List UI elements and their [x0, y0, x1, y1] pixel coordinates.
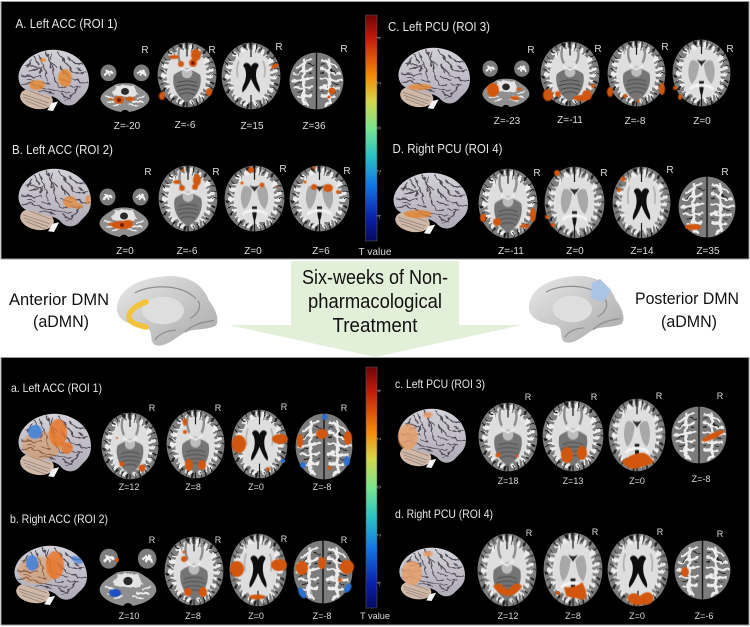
panel: before treatment results — [1, 2, 749, 259]
slice Z=0: R — [656, 391, 663, 401]
slice Z=36 — [290, 44, 348, 132]
slice Z=0: Z=0 — [629, 476, 645, 486]
slice Z=0 — [232, 402, 288, 492]
slice Z=-6: Z=-6 — [177, 246, 198, 257]
slice Z=0: Z=0 — [693, 116, 711, 127]
slice Z=-6: R — [212, 167, 220, 178]
slice Z=0: R — [726, 44, 734, 55]
slice Z=12: R — [526, 528, 533, 538]
slice Z=-6: R — [717, 529, 724, 539]
slice Z=0: Z=0 — [566, 246, 584, 257]
slice Z=0: Z=0 — [629, 611, 645, 621]
colorbar: top T value: -4 — [377, 215, 383, 219]
slice Z=14: Z=14 — [630, 246, 654, 257]
slice Z=8: R — [215, 403, 222, 413]
colorbar: top T value: 4 — [377, 36, 383, 40]
slice Z=0: Z=0 — [244, 246, 262, 257]
slice Z=0: Z=0 — [248, 482, 264, 492]
colorbar: top T value: T value — [358, 247, 392, 258]
slice Z=0 — [609, 391, 665, 486]
slice Z=-20: Z=-20 — [114, 121, 141, 132]
section D: Right PCU ROI 4 — [392, 141, 735, 257]
slice Z=15: Z=15 — [240, 121, 264, 132]
slice Z=-11 — [479, 168, 541, 257]
slice Z=-8: Z=-8 — [692, 474, 710, 484]
slice Z=8: R — [592, 527, 599, 537]
slice Z=8 — [165, 535, 223, 621]
slice Z=6 — [290, 166, 351, 257]
slice Z=8 — [167, 403, 224, 492]
slice Z=-8: Z=-8 — [313, 482, 331, 492]
slice Z=0 cerebellum: R — [144, 167, 152, 178]
colorbar: bottom T value: -2 — [377, 534, 383, 538]
slice Z=0 — [545, 167, 608, 257]
slice Z=0: R — [600, 168, 608, 179]
section b: Right ACC ROI 2: b. Right ACC (ROI 2) — [10, 512, 108, 526]
label: Posterior DMN — [635, 289, 739, 331]
slice Z=-8: R — [341, 403, 348, 413]
slice Z=-11: R — [533, 168, 541, 179]
slice Z=13: Z=13 — [563, 476, 583, 486]
section B: Left ACC ROI 2 — [12, 142, 351, 257]
brain render B — [18, 169, 91, 233]
icon: medial brain with posterior DMN — [529, 276, 624, 343]
slice Z=-23 — [482, 45, 535, 127]
slice Z=0 cerebellum: Z=0 — [116, 246, 134, 257]
slice Z=0: R — [281, 534, 288, 544]
slice Z=-11: Z=-11 — [498, 246, 524, 257]
slice Z=-6 — [675, 529, 730, 621]
slice Z=0 cerebellum — [100, 167, 152, 257]
arrow: six-weeks of treatment — [229, 261, 522, 357]
brain render a — [18, 414, 91, 478]
slice Z=13 — [543, 392, 603, 486]
slice Z=10 cerebellum: R — [149, 535, 156, 545]
slice Z=12: Z=12 — [119, 482, 139, 492]
slice Z=8: Z=8 — [185, 611, 201, 621]
slice Z=-23: R — [527, 45, 535, 56]
slice Z=8 — [544, 527, 602, 621]
slice Z=-8: R — [717, 391, 724, 401]
slice Z=15 — [222, 42, 283, 132]
slice Z=-8 — [672, 391, 726, 484]
slice Z=18: Z=18 — [498, 476, 518, 486]
label: Anterior DMN: Anterior DMN — [9, 290, 109, 309]
slice Z=-11: R — [594, 44, 602, 55]
slice Z=18 — [479, 392, 537, 486]
slice Z=-6 — [159, 166, 220, 257]
section B: Left ACC ROI 2: B. Left ACC (ROI 2) — [12, 142, 113, 157]
brain render d — [399, 548, 465, 602]
colorbar: top T value — [358, 15, 392, 258]
colorbar: top T value: -2 — [377, 170, 383, 174]
slice Z=14 — [613, 165, 674, 257]
slice Z=0: R — [279, 164, 287, 175]
section d: Right PCU ROI 4: d. Right PCU (ROI 4) — [395, 507, 493, 521]
brain render C — [398, 48, 470, 110]
label: Anterior DMN — [9, 290, 109, 331]
slice Z=-8: Z=-8 — [313, 611, 331, 621]
slice Z=18: R — [525, 392, 532, 402]
section C: Left PCU ROI 3: C. Left PCU (ROI 3) — [388, 19, 490, 34]
slice Z=35: Z=35 — [696, 246, 720, 257]
slice Z=35 — [679, 167, 735, 257]
slice Z=10 cerebellum: Z=10 — [119, 611, 139, 621]
slice Z=-23: Z=-23 — [494, 116, 521, 127]
brain render A — [18, 50, 89, 112]
section a: Left ACC ROI 1: a. Left ACC (ROI 1) — [11, 381, 102, 395]
section D: Right PCU ROI 4: D. Right PCU (ROI 4) — [392, 141, 502, 156]
slice Z=-8: Z=-8 — [625, 116, 646, 127]
colorbar: bottom T value: 4 — [377, 389, 383, 393]
slice Z=-6: Z=-6 — [695, 611, 713, 621]
colorbar: top T value: 2 — [377, 81, 383, 85]
slice Z=12: R — [149, 403, 156, 413]
slice Z=-20 — [100, 45, 150, 132]
slice Z=6: Z=6 — [312, 246, 330, 257]
label: Anterior DMN: (aDMN) — [33, 312, 89, 331]
slice Z=15: R — [275, 42, 283, 53]
slice Z=-8: R — [341, 535, 348, 545]
slice Z=14: R — [666, 165, 674, 176]
section d: Right PCU ROI 4 — [395, 507, 730, 621]
colorbar: bottom T value: 0 — [377, 485, 383, 489]
label: Posterior DMN: (aDMN) — [661, 312, 717, 331]
slice Z=-8 — [296, 403, 352, 492]
slice Z=-11 — [541, 42, 602, 126]
arrow: six-weeks of treatment: Treatment — [332, 315, 418, 337]
slice Z=0 — [225, 164, 287, 257]
slice Z=-6 — [158, 43, 216, 131]
brain render c — [398, 409, 466, 469]
colorbar: bottom T value: -4 — [377, 582, 383, 586]
slice Z=0: R — [281, 402, 288, 412]
slice Z=0 — [230, 534, 288, 621]
slice Z=0: Z=0 — [248, 611, 264, 621]
slice Z=36: Z=36 — [302, 121, 326, 132]
slice Z=8: Z=8 — [185, 482, 201, 492]
colorbar: bottom T value: 2 — [377, 437, 383, 441]
slice Z=6: R — [343, 166, 351, 177]
slice Z=-8 — [294, 535, 354, 621]
slice Z=12 — [102, 403, 158, 492]
slice Z=35: R — [721, 167, 729, 178]
section a: Left ACC ROI 1 — [11, 381, 352, 492]
slice Z=12: Z=12 — [498, 611, 518, 621]
slice Z=-8 — [607, 41, 669, 127]
slice Z=-6: R — [208, 45, 216, 56]
slice Z=8: Z=8 — [565, 611, 581, 621]
panel: after treatment results — [1, 358, 749, 625]
slice Z=10 cerebellum — [100, 535, 156, 621]
section A: Left ACC ROI 1: A. Left ACC (ROI 1) — [16, 16, 118, 31]
colorbar: bottom T value — [360, 367, 390, 622]
section c: Left PCU ROI 3: c. Left PCU (ROI 3) — [395, 377, 485, 391]
section b: Right ACC ROI 2 — [10, 512, 354, 621]
slice Z=8: R — [215, 535, 222, 545]
section c: Left PCU ROI 3 — [395, 377, 726, 486]
colorbar: bottom T value: T value — [360, 611, 390, 622]
slice Z=12 — [478, 528, 536, 621]
slice Z=0: R — [657, 527, 664, 537]
slice Z=-6: Z=-6 — [175, 120, 196, 131]
slice Z=0 — [673, 40, 734, 127]
arrow: six-weeks of treatment: Six-weeks of Non- — [302, 267, 448, 289]
label: Posterior DMN: Posterior DMN — [635, 289, 739, 308]
brain render b — [14, 546, 87, 606]
slice Z=36: R — [340, 44, 348, 55]
slice Z=-20: R — [141, 45, 149, 56]
slice Z=-8: R — [661, 42, 669, 53]
section A: Left ACC ROI 1 — [16, 16, 348, 132]
section C: Left PCU ROI 3 — [388, 19, 734, 127]
brain render D — [393, 173, 468, 235]
slice Z=-11: Z=-11 — [557, 115, 583, 126]
arrow: six-weeks of treatment: pharmacological — [308, 291, 442, 313]
slice Z=0 — [608, 527, 668, 621]
slice Z=13: R — [591, 392, 598, 402]
icon: medial brain with anterior DMN — [117, 276, 217, 346]
colorbar: top T value: 0 — [377, 126, 383, 130]
